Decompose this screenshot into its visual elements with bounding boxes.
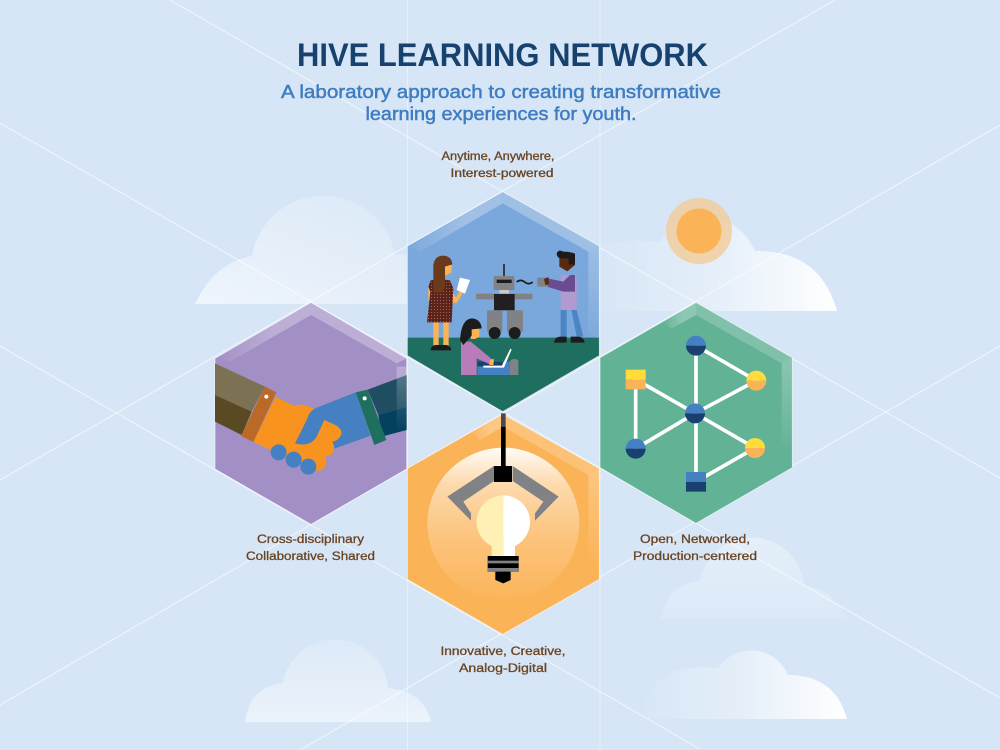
panel: bottom hexagon light bulb — [407, 413, 599, 634]
right sleeve — [356, 367, 407, 445]
label: anytime: Interest-powered — [450, 168, 554, 180]
label: open: Open, Networked, — [640, 534, 750, 546]
figure: standing man — [537, 251, 585, 343]
label: open — [633, 534, 757, 563]
panel: top hexagon robot scene — [407, 192, 599, 412]
glow — [427, 448, 579, 600]
label: cross-disciplinary — [246, 534, 375, 563]
cloud: lower left — [245, 639, 431, 722]
figure: robot — [476, 264, 533, 339]
label: cross-disciplinary: Collaborative, Shared — [246, 551, 375, 563]
figure: seated girl — [460, 318, 518, 375]
label: innovative: Analog-Digital — [459, 663, 547, 675]
sun — [666, 198, 732, 264]
subtitle — [281, 82, 721, 124]
label: innovative: Innovative, Creative, — [440, 646, 566, 658]
cloud: behind sun — [600, 216, 837, 311]
label: anytime — [442, 151, 554, 180]
cloud: middle right — [661, 537, 847, 619]
cloud: upper left — [195, 195, 408, 304]
subtitle: A laboratory approach to creating transformative — [281, 82, 721, 102]
panel: left hexagon handshake — [215, 302, 407, 524]
figure: standing girl — [427, 256, 470, 350]
label: innovative — [440, 646, 566, 675]
robot claw — [447, 413, 559, 521]
label: open: Production-centered — [633, 551, 757, 563]
label: cross-disciplinary: Cross-disciplinary — [257, 534, 364, 546]
label: anytime: Anytime, Anywhere, — [442, 151, 554, 163]
left sleeve — [215, 363, 276, 442]
clasped hands — [253, 392, 371, 475]
title: HIVE LEARNING NETWORK — [297, 37, 708, 73]
network nodes — [626, 336, 766, 492]
panel: right hexagon network — [600, 302, 792, 523]
cloud: lower right — [640, 650, 847, 719]
network links — [636, 346, 756, 482]
subtitle: learning experiences for youth. — [366, 104, 636, 124]
light bulb — [477, 495, 530, 583]
